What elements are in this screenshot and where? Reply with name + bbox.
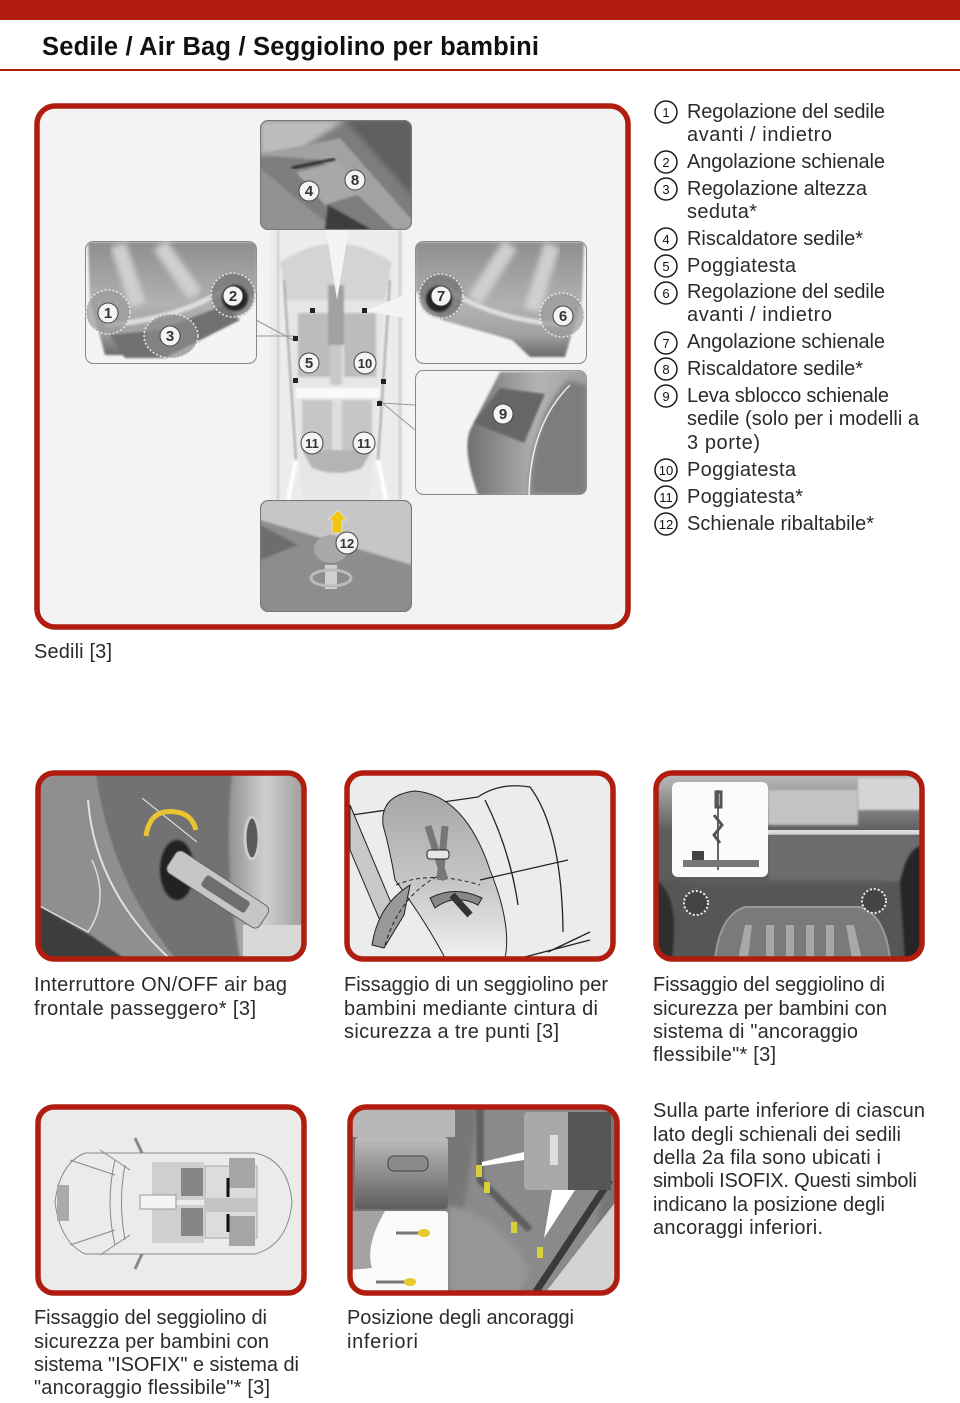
text block: ISOFIX symbols note: della 2a fila sono ubicati i [653,1147,881,1169]
text block: ISOFIX symbols note: lato degli schienali dei sedili [653,1124,901,1146]
number badges on diagram: 10 [358,356,372,371]
panel: airbag switch photo [38,773,305,959]
caption: seats: Sedili [3] [34,641,112,663]
caption: flexible anchorage: flessibile"* [3] [653,1044,776,1066]
caption: airbag switch: frontale passeggero* [3] [34,998,256,1020]
legend list: 1 [662,105,670,120]
caption: airbag switch: Interruttore ON/OFF air bag [34,974,287,996]
caption: flexible anchorage: Fissaggio del seggiolino di [653,974,885,996]
caption: ISOFIX system: Fissaggio del seggiolino di [34,1307,267,1329]
legend list: Angolazione schienale [687,151,885,173]
caption: ISOFIX system [34,1307,299,1399]
car top view [270,230,402,500]
legend list: Regolazione del sedile [687,281,885,303]
inset: left seat [86,242,256,364]
number badges on diagram: 8 [351,172,359,189]
panel: seat overview diagram [37,106,628,627]
legend list: 4 [662,232,670,247]
number badges on diagram: 7 [437,288,445,305]
number badges on diagram: 1 [104,305,112,322]
legend list: 8 [662,362,670,377]
panel: ISOFIX car top view [38,1107,304,1293]
text block: ISOFIX symbols note: indicano la posizione degli [653,1194,885,1216]
legend list: 5 [662,259,670,274]
legend list: Leva sblocco schienale [687,385,889,407]
caption: ISOFIX system: sistema "ISOFIX" e sistema di [34,1354,299,1376]
caption: three-point belt: sicurezza a tre punti [3] [344,1021,559,1043]
number badges on diagram: 11 [305,436,319,451]
number badges on diagram: 9 [499,406,507,423]
number badges on diagram: 11 [357,436,371,451]
caption: flexible anchorage [653,974,887,1066]
caption: three-point belt: Fissaggio di un seggiolino per [344,974,608,996]
legend list: Poggiatesta [687,459,797,481]
legend list: Regolazione altezza [687,178,868,200]
title: Sedile / Air Bag / Seggiolino per bambini [42,33,539,61]
legend list: Poggiatesta* [687,486,803,508]
legend list: Regolazione del sedile [687,101,885,123]
caption: three-point belt [344,974,608,1043]
legend list: 2 [662,155,670,170]
legend list: 11 [659,490,673,505]
caption: ISOFIX system: "ancoraggio flessibile"* [3] [34,1377,270,1399]
panel: lower anchor locations photo [350,1107,617,1293]
legend list: 9 [662,389,670,404]
caption: ISOFIX system: sicurezza per bambini con [34,1331,269,1353]
legend list: Riscaldatore sedile* [687,358,863,380]
legend list: 3 porte) [687,432,760,454]
number badges on diagram: 12 [340,536,354,551]
text block: ISOFIX symbols note: simboli ISOFIX. Questi simboli [653,1170,917,1192]
inset: folding seatback latch [260,500,412,612]
legend list: seduta* [687,201,757,223]
connector dots [293,308,386,406]
legend list: 7 [662,336,670,351]
legend list [655,101,920,535]
caption: lower anchors: Posizione degli ancoraggi [347,1307,574,1329]
panel: flexible anchorage photo [656,773,922,959]
legend list: sedile (solo per i modelli a [687,408,920,430]
header bar [0,0,960,20]
text block: ISOFIX symbols note: Sulla parte inferiore di ciascun [653,1100,925,1122]
legend list: avanti / indietro [687,304,832,326]
inset: right seat [416,242,586,364]
caption: lower anchors: inferiori [347,1331,418,1353]
caption: flexible anchorage: sicurezza per bambini con [653,998,887,1020]
text block: ISOFIX symbols note [653,1100,925,1239]
legend list: 10 [659,463,673,478]
caption: three-point belt: bambini mediante cintura di [344,998,598,1020]
legend list: Poggiatesta [687,255,797,277]
panel: child seat with three-point belt [347,773,613,959]
legend list: Schienale ribaltabile* [687,513,874,535]
inset: seatback release lever [416,370,586,494]
number badges on diagram: 3 [166,328,174,345]
number badges on diagram: 5 [305,355,313,372]
text block: ISOFIX symbols note: ancoraggi inferiori. [653,1217,823,1239]
number badges on diagram: 6 [559,308,567,325]
legend list: 6 [662,286,670,301]
number badges on diagram: 2 [229,288,237,305]
legend list: Angolazione schienale [687,331,885,353]
number badges on diagram: 4 [305,183,314,200]
number badges on diagram [98,170,573,554]
inset: centre console switches [260,120,412,230]
caption: lower anchors [347,1307,574,1353]
legend list: 3 [662,182,670,197]
caption: airbag switch [34,974,287,1020]
legend list: avanti / indietro [687,124,832,146]
legend list: 12 [659,517,673,532]
legend list: Riscaldatore sedile* [687,228,863,250]
caption: flexible anchorage: sistema di "ancoraggio [653,1021,858,1043]
